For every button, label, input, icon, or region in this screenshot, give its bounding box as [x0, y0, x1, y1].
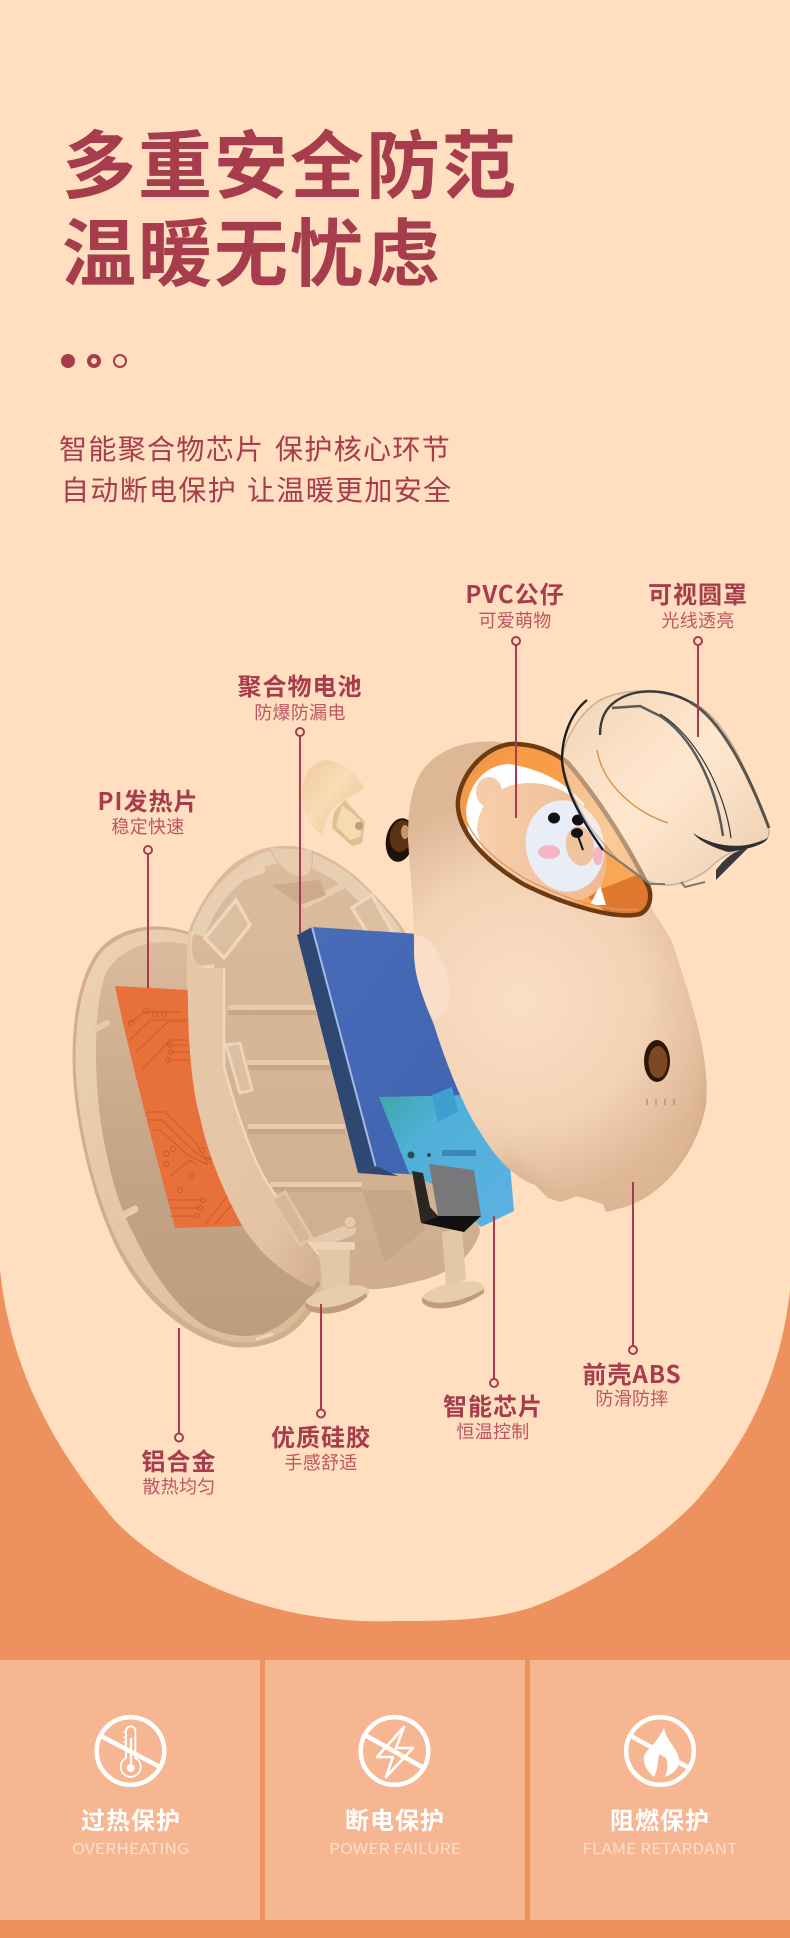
background: orange lower band with curved edge: [0, 1270, 790, 1938]
panel: overheating: 过热保护: [81, 1801, 181, 1836]
intro text: 保护核心环节: [275, 428, 451, 468]
callout: PI heater: 稳定快速: [111, 813, 185, 839]
callout: clear dome: 可视圆罩: [648, 575, 748, 610]
callout: smart chip: [443, 1216, 543, 1444]
transparent dome cover: [562, 691, 769, 887]
panel: power failure: 断电保护: [345, 1801, 445, 1836]
callout: PI heater: PI发热片: [98, 782, 198, 817]
icon: no lightning: [361, 1717, 428, 1785]
panel: power failure: POWER FAILURE: [329, 1838, 461, 1859]
callout: polymer battery: [238, 667, 362, 933]
window with bear figure: [458, 744, 660, 920]
callout: polymer battery: 防爆防漏电: [254, 699, 346, 725]
panel: power failure: [265, 1660, 525, 1920]
callout: PVC figure: 可爱萌物: [478, 607, 552, 633]
USB connector: [412, 1171, 438, 1223]
side button: [382, 813, 445, 864]
polymer battery: [297, 927, 500, 1180]
callout: ABS front shell: [582, 1182, 682, 1411]
intro text: [59, 428, 452, 509]
callout: ABS front shell: 防滑防摔: [595, 1385, 669, 1411]
panel: flame retardant: [530, 1660, 790, 1920]
silicone feet: [302, 1228, 487, 1316]
callout: aluminium alloy: 铝合金: [142, 1442, 216, 1477]
callout: clear dome: [648, 575, 748, 737]
control chip board: [379, 1087, 514, 1232]
panel: flame retardant: 阻燃保护: [610, 1801, 710, 1836]
back shell: [73, 926, 330, 1348]
intro text: 自动断电保护: [61, 469, 237, 509]
panel: overheating: OVERHEATING: [72, 1838, 189, 1859]
shell arch band: [198, 856, 395, 935]
callout: silicone: 优质硅胶: [271, 1418, 371, 1453]
middle shell interior: [188, 846, 480, 1289]
icon: no thermometer: [97, 1717, 164, 1785]
bear: [476, 777, 502, 807]
front shell body: [408, 741, 707, 1212]
callout: aluminium alloy: [142, 1328, 216, 1499]
icon: no flame: [626, 1717, 694, 1785]
callout: PI heater: [98, 782, 198, 988]
title: 多重安全防范: [62, 107, 518, 214]
title: 温暖无忧虑: [62, 195, 442, 302]
panel: overheating: [0, 1660, 260, 1920]
callout: PVC figure: PVC公仔: [465, 575, 565, 610]
lower vent hole: [644, 1040, 670, 1082]
callout: aluminium alloy: 散热均匀: [142, 1473, 216, 1499]
callout: PVC figure: [465, 575, 565, 818]
battery shelf ribs: [228, 1005, 362, 1192]
callout: silicone: 手感舒适: [284, 1449, 358, 1475]
callout: smart chip: 恒温控制: [456, 1418, 530, 1444]
callout: silicone: [271, 1304, 371, 1475]
shell top ridge structure: [205, 895, 394, 958]
callout: smart chip: 智能芯片: [443, 1387, 543, 1422]
pagination dots: [61, 354, 126, 368]
callout: clear dome: 光线透亮: [661, 607, 735, 633]
arm bulge: [414, 935, 450, 1020]
rim tabs: [94, 1023, 107, 1030]
shell wall front band: [187, 932, 330, 1287]
indicator dots: [646, 1099, 675, 1105]
callout: polymer battery: 聚合物电池: [238, 667, 362, 702]
intro text: 智能聚合物芯片: [59, 428, 264, 468]
ear piece: [302, 760, 365, 846]
product exploded view: [73, 691, 769, 1348]
intro text: 让温暖更加安全: [247, 469, 452, 509]
title: [62, 107, 518, 302]
heating film with circuit pattern: [115, 986, 242, 1228]
panel: flame retardant: FLAME RETARDANT: [582, 1838, 738, 1859]
callout: ABS front shell: 前壳ABS: [582, 1355, 682, 1390]
